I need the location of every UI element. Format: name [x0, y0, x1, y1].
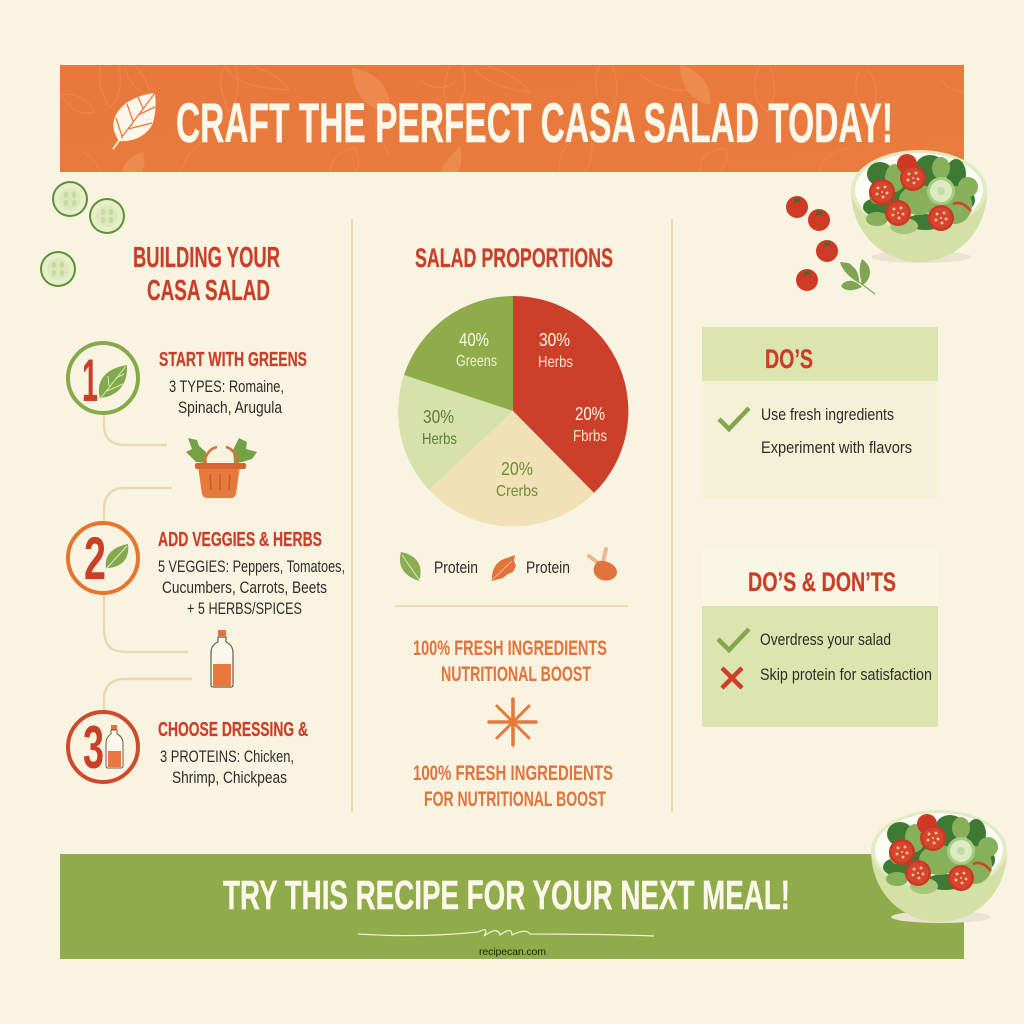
step 1 text: Spinach, Arugula [178, 398, 282, 417]
callout: fresh ingredients 2: 100% FRESH INGREDIENTS [413, 762, 613, 785]
icon: white leaf [113, 93, 156, 149]
panel: building your casa salad [68, 242, 345, 787]
step 2 badge: 2 [84, 525, 106, 592]
legend [400, 549, 617, 581]
step 1 badge [68, 343, 138, 414]
footer banner [60, 854, 964, 959]
legend: Protein [434, 558, 478, 577]
step 1 badge: 1 [82, 347, 98, 414]
source label: recipecan.com [479, 946, 546, 958]
step 1 text: START WITH GREENS [159, 349, 307, 371]
step 2 text [158, 529, 345, 618]
column dividers [352, 219, 672, 812]
step 3 badge: 3 [83, 714, 104, 781]
panel: do's [702, 327, 938, 498]
heading: building: CASA SALAD [147, 275, 270, 307]
icon: salad bowl top [851, 150, 987, 263]
step 2 text: Cucumbers, Carrots, Beets [162, 578, 327, 597]
step 2 text: 5 VEGGIES: Peppers, Tomatoes, [158, 557, 345, 576]
panel: salad proportions [395, 243, 628, 811]
step 1 text [159, 349, 307, 417]
panel: do's: Experiment with flavors [761, 438, 912, 457]
callout: fresh ingredients 2 [413, 762, 613, 811]
heading: proportions: SALAD PROPORTIONS [415, 243, 613, 273]
heading: building [133, 242, 280, 307]
callout: fresh ingredients 1: 100% FRESH INGREDIENTS [413, 637, 607, 660]
step 2 text: ADD VEGGIES & HERBS [158, 529, 322, 551]
step 3 text [158, 719, 308, 787]
panel: do's: DO’S [765, 344, 813, 374]
pie chart: Crerbs [496, 483, 538, 500]
squiggle flourish [358, 930, 654, 936]
pie chart: 20% [575, 404, 605, 424]
icon: salad bowl bottom [871, 810, 1007, 923]
icon: basket [186, 438, 257, 498]
pie chart: 40% [459, 330, 489, 350]
icon: parsley [840, 259, 875, 294]
pie chart: Herbs [538, 354, 573, 371]
pie chart: Greens [456, 353, 497, 370]
icon: cucumber slices [40, 181, 125, 287]
icon: cherry tomatoes [786, 196, 838, 291]
legend: Protein [526, 558, 570, 577]
icon: star burst [489, 699, 536, 745]
header banner [60, 65, 964, 172]
step 1 text: 3 TYPES: Romaine, [169, 377, 284, 396]
pie chart: Herbs [422, 431, 457, 448]
step 2 text: + 5 HERBS/SPICES [187, 599, 302, 618]
divider [395, 605, 628, 607]
callout: fresh ingredients 1: NUTRITIONAL BOOST [441, 663, 591, 686]
step 3 text: CHOOSE DRESSING & [158, 719, 308, 741]
step 3 text: 3 PROTEINS: Chicken, [160, 747, 294, 766]
panel: do's and don'ts [702, 549, 938, 727]
panel: do's: Use fresh ingredients [761, 405, 894, 424]
panel: do's and don'ts: Skip protein for satisfaction [760, 665, 932, 684]
pie chart: 20% [501, 459, 533, 479]
pie chart [398, 296, 628, 526]
heading: building: BUILDING YOUR [133, 242, 280, 274]
panel: do's and don'ts: Overdress your salad [760, 630, 891, 649]
panel: do's and don'ts: DO’S & DON’TS [748, 567, 896, 597]
step 3 badge [68, 712, 138, 782]
step 2 badge [68, 523, 138, 593]
callout: fresh ingredients 1 [413, 637, 607, 686]
pie chart: 30% [539, 330, 570, 350]
icon: dressing bottle [211, 630, 233, 687]
pie chart: 30% [423, 407, 454, 427]
connectors [104, 415, 192, 711]
pie chart: Fbrbs [573, 428, 607, 445]
callout: fresh ingredients 2: FOR NUTRITIONAL BOOST [424, 788, 606, 811]
step 3 text: Shrimp, Chickpeas [172, 768, 287, 787]
